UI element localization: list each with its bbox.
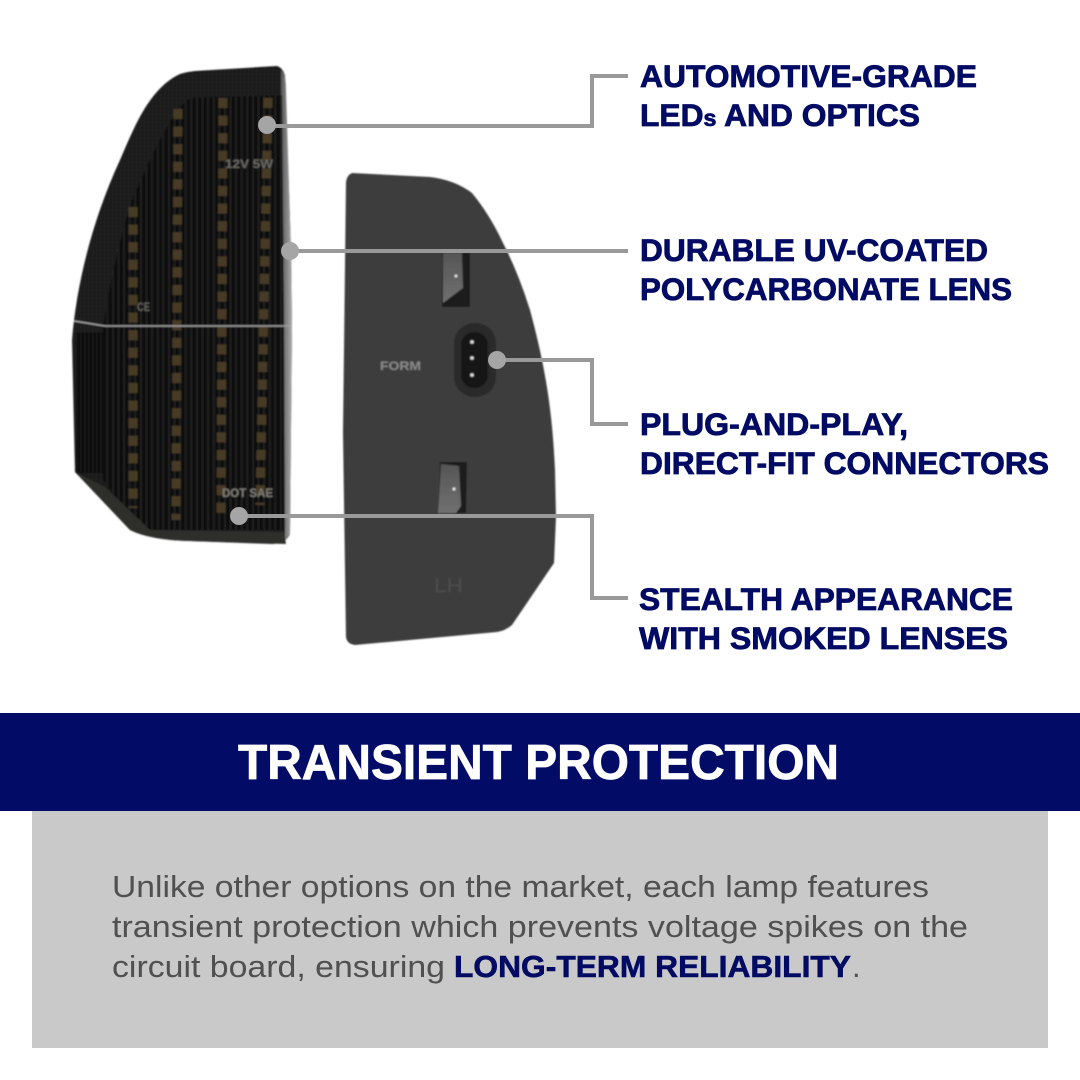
feature label: connectors — [640, 406, 1049, 481]
lens marking: CE: CE — [137, 300, 150, 314]
feature label: stealth appearance: STEALTH APPEARANCE — [639, 581, 1013, 617]
body text — [112, 869, 968, 984]
body text: circuit board, ensuring — [112, 949, 445, 984]
feature label: connectors: DIRECT-FIT CONNECTORS — [640, 445, 1049, 481]
feature label: polycarbonate lens — [640, 232, 1012, 307]
banner — [0, 713, 1080, 811]
feature label: polycarbonate lens: POLYCARBONATE LENS — [640, 271, 1012, 307]
lamp: rear housing — [343, 173, 556, 645]
callout line: connectors — [488, 351, 628, 424]
body text: transient protection which prevents voltage spikes on the — [112, 909, 968, 944]
lens ribbed inner area — [103, 95, 284, 530]
lens lower bevel — [75, 472, 286, 544]
lens seam — [74, 321, 291, 326]
body text: Unlike other options on the market, each lamp features — [112, 869, 929, 904]
callout line: LEDs and optics — [258, 76, 628, 134]
lower mounting clip — [438, 462, 467, 513]
lens marking: 12V 5W: 12V 5W — [225, 157, 274, 171]
feature label: automotive-grade LEDs — [640, 58, 977, 133]
text panel background — [32, 811, 1048, 1048]
LED columns — [133, 98, 268, 520]
lamp: front smoked lens — [72, 66, 292, 544]
lens chrome right edge — [281, 70, 292, 541]
lens outer body — [72, 66, 292, 544]
feature label: connectors: PLUG-AND-PLAY, — [640, 406, 908, 442]
feature label: polycarbonate lens: DURABLE UV-COATED — [640, 232, 988, 268]
feature label: automotive-grade LEDs: AUTOMOTIVE-GRADE — [640, 58, 977, 94]
feature label: stealth appearance: WITH SMOKED LENSES — [639, 620, 1008, 656]
housing body — [343, 173, 556, 645]
feature label: stealth appearance — [639, 581, 1013, 656]
housing marking: LH: LH — [434, 576, 463, 597]
callout line: smoked lenses — [230, 507, 628, 598]
feature label: automotive-grade LEDs: LEDs AND OPTICS — [640, 97, 920, 133]
three-pin connector — [454, 323, 496, 397]
body text: LONG-TERM RELIABILITY — [454, 949, 851, 984]
lens marking: DOT SAE: DOT SAE — [222, 486, 273, 500]
callout line: polycarbonate lens — [281, 242, 628, 260]
housing marking: FORM: FORM — [380, 359, 421, 373]
upper mounting clip — [442, 253, 470, 307]
lens side grille — [76, 333, 105, 473]
body text: . — [852, 949, 861, 984]
banner heading: TRANSIENT PROTECTION — [238, 735, 839, 790]
